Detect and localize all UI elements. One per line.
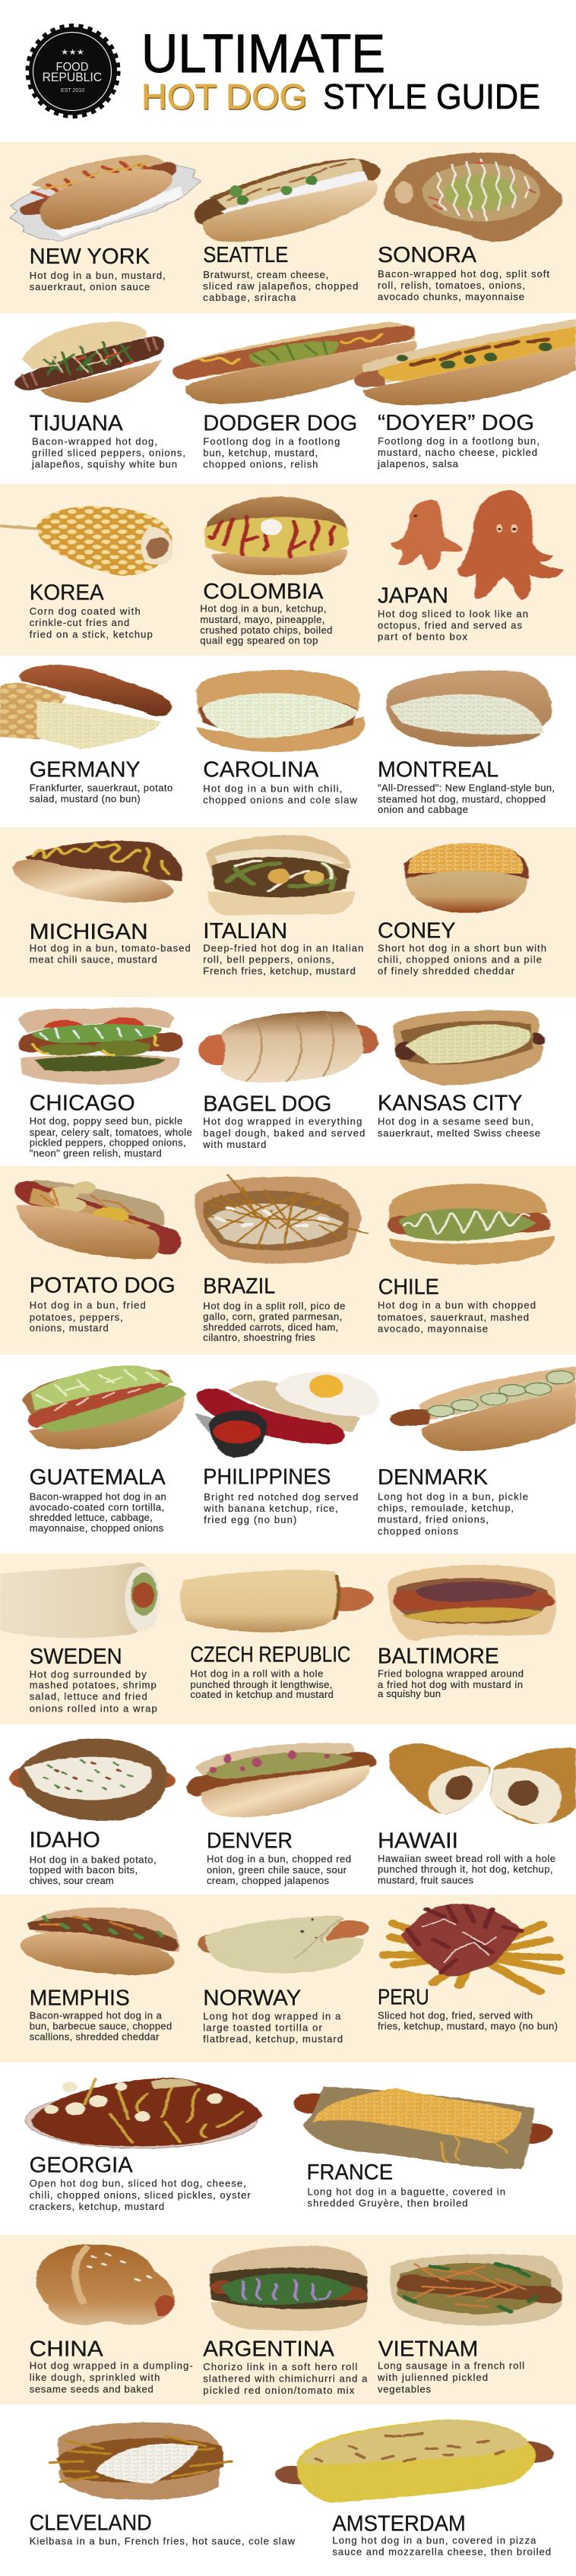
description: Guatemala: avocado-coated corn tortilla, bbox=[30, 1501, 164, 1512]
panel: Dodger Dog bbox=[172, 321, 417, 470]
title: New York: NEW YORK bbox=[30, 245, 150, 269]
description: Tijuana: jalapeños, squishy white bun bbox=[31, 459, 177, 470]
description: France: Long hot dog in a baguette, covered in bbox=[307, 2186, 505, 2197]
description: Argentina: pickled red onion/tomato mix bbox=[203, 2385, 355, 2396]
description: Seattle: Bratwurst, cream cheese, bbox=[203, 269, 328, 280]
panel: Argentina bbox=[203, 2246, 368, 2396]
panel: Colombia bbox=[200, 497, 349, 646]
illustration: Brazil hot dog bbox=[195, 1175, 367, 1263]
description: Baltimore: a squishy bun bbox=[378, 1688, 441, 1699]
description: Chile: tomatoes, sauerkraut, mashed bbox=[378, 1311, 529, 1323]
panel: Norway bbox=[198, 1916, 369, 2044]
heading: ultimate hot dog style guide: HOT DOG bbox=[141, 77, 307, 116]
title: Carolina: CAROLINA bbox=[203, 758, 319, 782]
illustration: Italian hot dog bbox=[206, 835, 354, 915]
band: row 5 bbox=[0, 827, 576, 997]
panel: Chicago bbox=[18, 1007, 192, 1159]
description: New York: Hot dog in a bun, mustard, bbox=[30, 270, 166, 281]
illustration: Philippines hot dog with egg bbox=[195, 1372, 379, 1457]
description: Norway: large toasted tortilla or bbox=[203, 2021, 323, 2033]
illustration: Doyer Dog bbox=[354, 319, 576, 405]
description: Denver: cream, chopped jalapenos bbox=[207, 1875, 330, 1886]
title: Georgia: GEORGIA bbox=[30, 2153, 133, 2177]
illustration: Germany sausage with sauerkraut bbox=[0, 665, 172, 750]
heading: ultimate hot dog style guide: ULTIMATE bbox=[141, 24, 385, 84]
description: Georgia bbox=[30, 2177, 251, 2212]
illustration: Baltimore hot dog bbox=[388, 1565, 556, 1641]
panel: Carolina bbox=[196, 670, 365, 806]
description: Georgia: chili, chopped onions, sliced pickles, oyster bbox=[30, 2189, 251, 2201]
description: Coney: of finely shredded cheddar bbox=[378, 966, 515, 977]
illustration: Bagel Dog bbox=[198, 1011, 378, 1083]
description: Czech Republic: Hot dog in a roll with a hole bbox=[190, 1667, 323, 1679]
illustration: Seattle hot dog bbox=[195, 158, 380, 242]
panel: Coney bbox=[378, 843, 546, 977]
description: Vietnam: with julienned pickled bbox=[377, 2372, 488, 2383]
description: Guatemala: shredded lettuce, cabbage, bbox=[30, 1512, 153, 1523]
description: Tijuana bbox=[31, 436, 185, 470]
description: France bbox=[307, 2186, 505, 2209]
title: Philippines: PHILIPPINES bbox=[203, 1465, 331, 1489]
description: Denmark: chips, remoulade, ketchup, bbox=[378, 1502, 514, 1513]
panel: Denmark bbox=[378, 1366, 576, 1537]
description: Doyer Dog: Footlong dog in a footlong bun, bbox=[378, 435, 540, 447]
description: Potato Dog bbox=[30, 1300, 146, 1334]
description: Michigan: Hot dog in a bun, tomato-based bbox=[30, 943, 191, 954]
description: Carolina: chopped onions and cole slaw bbox=[203, 795, 357, 806]
description: France: shredded Gruyère, then broiled bbox=[307, 2198, 468, 2209]
title: Cleveland: CLEVELAND bbox=[30, 2511, 152, 2536]
description: Norway bbox=[203, 2010, 343, 2044]
title: Kansas City: KANSAS CITY bbox=[378, 1092, 523, 1116]
description: Denmark bbox=[378, 1490, 528, 1537]
illustration: Coney hot dog bbox=[404, 843, 529, 913]
description: New York: sauerkraut, onion sauce bbox=[30, 281, 150, 292]
description: China: sesame seeds and baked bbox=[30, 2383, 153, 2394]
panel: Georgia bbox=[25, 2078, 263, 2212]
description: Sweden: onions rolled into a wrap bbox=[30, 1702, 157, 1714]
title: Tijuana: TIJUANA bbox=[30, 412, 123, 436]
description: Denmark: chopped onions bbox=[378, 1525, 459, 1537]
illustration: Guatemala hot dog bbox=[22, 1366, 185, 1449]
panel: Italian bbox=[203, 835, 363, 977]
description: Philippines bbox=[203, 1491, 358, 1525]
description: Coney: chili, chopped onions and a pile bbox=[378, 954, 542, 966]
panel: Baltimore bbox=[378, 1565, 556, 1699]
illustration: Denmark hot dog bbox=[390, 1366, 576, 1451]
title: Memphis: MEMPHIS bbox=[30, 1986, 130, 2010]
description: Chicago: "neon" green relish, mustard bbox=[30, 1148, 162, 1159]
illustration: Georgia open hot dog bbox=[25, 2078, 263, 2148]
illustration: Tijuana hot dog bbox=[14, 321, 164, 403]
panel: New York bbox=[11, 155, 201, 292]
description: China: like dough, sprinkled with bbox=[30, 2372, 160, 2383]
band: row 7 bbox=[0, 1166, 576, 1354]
description: Montreal: steamed hot dog, mustard, chopped bbox=[378, 794, 546, 805]
description: Denver: onion, green chile sauce, sour bbox=[207, 1864, 347, 1876]
illustration: Colombia hot dog bbox=[204, 497, 349, 575]
description: Hawaii: mustard, fruit sauces bbox=[378, 1874, 474, 1885]
description: Dodger Dog: chopped onions, relish bbox=[203, 459, 318, 470]
logo: Food Republic badge bbox=[28, 26, 118, 115]
description: Potato Dog: potatoes, peppers, bbox=[30, 1311, 123, 1323]
description: Brazil: shredded carrots, diced ham, bbox=[203, 1322, 338, 1333]
title: Michigan: MICHIGAN bbox=[30, 920, 148, 944]
illustration: Cleveland hot dog bbox=[49, 2423, 232, 2499]
description: Germany bbox=[30, 782, 172, 804]
description: Doyer Dog bbox=[377, 435, 540, 469]
panel: Denver bbox=[186, 1743, 377, 1886]
title: Peru: PERU bbox=[378, 1985, 429, 2009]
title: Denver: DENVER bbox=[207, 1829, 293, 1854]
title: Sweden: SWEDEN bbox=[30, 1645, 122, 1669]
title: China: CHINA bbox=[30, 2337, 103, 2362]
title: Dodger Dog: DODGER DOG bbox=[203, 412, 357, 436]
description: Memphis bbox=[30, 2009, 172, 2043]
description: Chile: Hot dog in a bun with chopped bbox=[378, 1300, 536, 1311]
illustration: Dodger Dog bbox=[172, 321, 417, 404]
description: Sonora bbox=[378, 268, 549, 302]
description: Bagel Dog: bagel dough, baked and served bbox=[203, 1127, 365, 1139]
logo: Food Republic badge: REPUBLIC bbox=[43, 70, 102, 84]
description: Dodger Dog: bun, ketchup, mustard, bbox=[203, 447, 318, 459]
description: Memphis: Bacon-wrapped hot dog in a bbox=[30, 2009, 162, 2021]
description: Brazil bbox=[203, 1300, 345, 1343]
description: Guatemala: mayonnaise, chopped onions bbox=[30, 1522, 164, 1534]
description: Cleveland: Kielbasa in a bun, French fries, hot sauce, cole slaw bbox=[30, 2535, 296, 2546]
band: row 11 bbox=[0, 1895, 576, 2062]
title: Denmark: DENMARK bbox=[378, 1465, 489, 1490]
illustration: Czech Republic hot dog bbox=[180, 1570, 374, 1633]
description: Memphis: scallions, shredded cheddar bbox=[30, 2031, 160, 2043]
description: Italian: French fries, ketchup, mustard bbox=[203, 966, 356, 977]
description: Guatemala bbox=[30, 1490, 166, 1534]
description: Kansas City: Hot dog in a sesame seed bun, bbox=[378, 1116, 533, 1127]
band: row 1 bbox=[0, 142, 576, 313]
description: Colombia: quail egg speared on top bbox=[200, 635, 318, 646]
description: Idaho bbox=[30, 1854, 157, 1886]
description: Korea: crinkle-cut fries and bbox=[30, 617, 129, 628]
panel: Seattle bbox=[195, 158, 380, 303]
description: Hawaii bbox=[378, 1853, 555, 1885]
description: Japan: part of bento box bbox=[378, 631, 468, 643]
description: Philippines: fried egg (no bun) bbox=[204, 1514, 296, 1525]
description: Argentina bbox=[203, 2361, 368, 2396]
panel: Cleveland bbox=[30, 2423, 296, 2546]
description: Argentina: Chorizo link in a soft hero roll bbox=[203, 2361, 357, 2372]
panel: Philippines bbox=[195, 1372, 379, 1525]
band: row 3 bbox=[0, 484, 576, 656]
description: Chicago: spear, celery salt, tomatoes, whole bbox=[30, 1127, 192, 1138]
description: Michigan: meat chili sauce, mustard bbox=[30, 954, 157, 966]
description: Baltimore: a fried hot dog with mustard in bbox=[378, 1679, 523, 1690]
panel: Brazil bbox=[195, 1175, 367, 1343]
description: Korea bbox=[30, 605, 153, 640]
title: Sonora: SONORA bbox=[378, 243, 477, 267]
description: Dodger Dog: Footlong dog in a footlong bbox=[203, 436, 340, 447]
description: Colombia: Hot dog in a bun, ketchup, bbox=[200, 603, 326, 615]
panel: Michigan bbox=[13, 841, 191, 966]
illustration: Vietnam hot dog bbox=[390, 2254, 562, 2326]
title: Guatemala: GUATEMALA bbox=[30, 1465, 166, 1490]
description: Japan: octopus, fried and served as bbox=[378, 620, 523, 631]
illustration: Japan octopus hot dogs bbox=[391, 490, 564, 600]
title: Bagel Dog: BAGEL DOG bbox=[203, 1092, 331, 1117]
title: Brazil: BRAZIL bbox=[203, 1274, 275, 1298]
panel: Doyer Dog bbox=[354, 319, 576, 469]
description: Amsterdam: Long hot dog in a bun, covered in pizza bbox=[332, 2534, 536, 2546]
panel: Montreal bbox=[378, 670, 555, 815]
title: Norway: NORWAY bbox=[203, 1986, 301, 2010]
title: Hawaii: HAWAII bbox=[378, 1828, 458, 1853]
description: Sweden: Hot dog surrounded by bbox=[30, 1668, 147, 1680]
description: Peru: fries, ketchup, mustard, mayo (no bun) bbox=[378, 2021, 558, 2032]
description: Sonora: avocado chunks, mayonnaise bbox=[378, 291, 524, 302]
illustration: Chicago hot dog bbox=[18, 1007, 183, 1085]
logo: Food Republic badge: EST 2010 bbox=[61, 88, 84, 93]
description: Bagel Dog: Hot dog wrapped in everything bbox=[203, 1116, 362, 1127]
title: Czech Republic: CZECH REPUBLIC bbox=[190, 1642, 350, 1667]
description: Memphis: bun, barbecue sauce, chopped bbox=[30, 2021, 172, 2032]
description: Philippines: with banana ketchup, rice, bbox=[203, 1503, 338, 1514]
title: Idaho: IDAHO bbox=[30, 1828, 100, 1853]
description: Seattle: cabbage, sriracha bbox=[203, 292, 296, 303]
illustration: Carolina hot dog bbox=[196, 670, 365, 752]
description: Czech Republic: coated in ketchup and mustard bbox=[190, 1689, 334, 1700]
description: Coney bbox=[378, 943, 546, 977]
description: Sonora: Bacon-wrapped hot dog, split soft bbox=[378, 268, 549, 280]
description: Denmark: mustard, fried onions, bbox=[378, 1513, 489, 1525]
illustration: Sweden wrap bbox=[0, 1563, 160, 1638]
description: Michigan bbox=[30, 943, 191, 966]
illustration: China dumpling hot dog bbox=[36, 2245, 175, 2325]
description: Seattle: sliced raw jalapeños, chopped bbox=[203, 280, 358, 292]
description: Chicago: pickled peppers, chopped onions, bbox=[30, 1137, 186, 1149]
title: Chile: CHILE bbox=[378, 1275, 439, 1299]
title: Seattle: SEATTLE bbox=[203, 243, 288, 267]
panel: Sweden bbox=[0, 1563, 160, 1714]
title: France: FRANCE bbox=[307, 2160, 393, 2185]
description: Guatemala: Bacon-wrapped hot dog in an bbox=[30, 1490, 166, 1502]
description: Montreal bbox=[378, 782, 555, 815]
description: Tijuana: Bacon-wrapped hot dog, bbox=[32, 436, 157, 447]
panel: Sonora bbox=[378, 153, 562, 302]
description: Hawaii: Hawaiian sweet bread roll with a hole bbox=[378, 1853, 555, 1864]
title: Doyer Dog: “DOYER” DOG bbox=[378, 411, 534, 435]
title: Potato Dog: POTATO DOG bbox=[30, 1274, 176, 1298]
description: Doyer Dog: jalapenos, salsa bbox=[377, 458, 459, 469]
illustration: Argentina hot dog bbox=[210, 2246, 367, 2331]
title: Italian: ITALIAN bbox=[203, 919, 287, 943]
illustration: Idaho baked potato hot dog bbox=[9, 1738, 176, 1821]
description: Italian: roll, bell peppers, onions, bbox=[203, 954, 334, 966]
description: Colombia: crushed potato chips, boiled bbox=[200, 624, 332, 636]
logo: Food Republic badge: ★★★ bbox=[61, 48, 84, 57]
panel: Bagel Dog bbox=[198, 1011, 378, 1150]
description: Argentina: slathered with chimichurri and a bbox=[203, 2373, 368, 2385]
illustration: Peru fries with sliced hot dog bbox=[384, 1904, 560, 1992]
description: Idaho: chives, sour cream bbox=[30, 1875, 114, 1886]
description: Idaho: Hot dog in a baked potato, bbox=[30, 1854, 157, 1865]
description: Japan: Hot dog sliced to look like an bbox=[378, 608, 528, 620]
description: Dodger Dog bbox=[203, 436, 340, 470]
panel: China bbox=[30, 2245, 193, 2394]
description: Georgia: crackers, ketchup, mustard bbox=[30, 2201, 164, 2212]
description: Carolina: Hot dog in a bun with chili, bbox=[203, 782, 342, 794]
panel: Idaho bbox=[9, 1738, 176, 1886]
illustration: Chile hot dog bbox=[388, 1184, 555, 1265]
panel: Czech Republic bbox=[180, 1570, 374, 1700]
panel: Peru bbox=[378, 1904, 560, 2032]
description: Korea: Corn dog coated with bbox=[30, 605, 141, 617]
description: Montreal: "All-Dressed": New England-style bun, bbox=[378, 782, 555, 794]
title: Japan: JAPAN bbox=[378, 583, 448, 608]
description: Coney: Short hot dog in a short bun with bbox=[378, 943, 546, 954]
band: row 13 bbox=[0, 2235, 576, 2404]
description: Doyer Dog: mustard, nacho cheese, pickled bbox=[378, 447, 537, 458]
description: Philippines: Bright red notched dog served bbox=[204, 1491, 358, 1503]
description: Montreal: onion and cabbage bbox=[378, 804, 468, 815]
title: Baltimore: BALTIMORE bbox=[378, 1644, 498, 1668]
illustration: Korea corn dog bbox=[0, 506, 173, 576]
heading: ultimate hot dog style guide: STYLE GUIDE bbox=[323, 77, 540, 116]
description: Kansas City: sauerkraut, melted Swiss cheese bbox=[378, 1127, 540, 1139]
description: Denver: Hot dog in a bun, chopped red bbox=[207, 1854, 351, 1865]
description: Bagel Dog bbox=[202, 1116, 365, 1150]
description: Amsterdam: sauce and mozzarella cheese, then broiled bbox=[332, 2546, 551, 2557]
panel: France bbox=[294, 2087, 553, 2209]
logo: Food Republic badge: FOOD bbox=[56, 61, 88, 74]
panel: Guatemala bbox=[22, 1366, 185, 1534]
illustration: Sonora hot dog bbox=[384, 153, 562, 242]
panel: Germany bbox=[0, 665, 172, 804]
description: Hawaii: punched through it, hot dog, ketchup, bbox=[378, 1863, 553, 1875]
illustration: France baguette hot dog bbox=[294, 2087, 553, 2169]
description: Germany: Frankfurter, sauerkraut, potato bbox=[30, 782, 172, 794]
panel: Potato Dog bbox=[14, 1180, 181, 1334]
description: New York bbox=[30, 270, 166, 292]
description: Baltimore: Fried bologna wrapped around bbox=[378, 1667, 524, 1679]
title: Amsterdam: AMSTERDAM bbox=[332, 2512, 466, 2536]
title: Montreal: MONTREAL bbox=[378, 758, 498, 782]
description: Sweden: mashed potatoes, shrimp bbox=[30, 1679, 157, 1691]
description: Colombia bbox=[200, 603, 332, 646]
description: Vietnam: vegetables bbox=[378, 2383, 432, 2394]
description: Potato Dog: Hot dog in a bun, fried bbox=[30, 1300, 146, 1311]
title: Korea: KOREA bbox=[30, 580, 104, 605]
panel: Amsterdam bbox=[276, 2420, 554, 2557]
description: Korea: fried on a stick, ketchup bbox=[30, 628, 153, 640]
description: Potato Dog: onions, mustard bbox=[30, 1323, 109, 1334]
title: Vietnam: VIETNAM bbox=[378, 2337, 478, 2362]
description: Chile bbox=[378, 1300, 536, 1334]
description: Idaho: topped with bacon bits, bbox=[30, 1864, 138, 1876]
panel: Japan bbox=[378, 490, 564, 643]
illustration: Montreal hot dog bbox=[386, 670, 552, 747]
illustration: Potato Dog bbox=[14, 1180, 181, 1259]
description: Norway: Long hot dog wrapped in a bbox=[203, 2010, 341, 2021]
description: Vietnam: Long sausage in a french roll bbox=[378, 2359, 524, 2371]
description: Germany: salad, mustard (no bun) bbox=[30, 793, 141, 804]
title: Chicago: CHICAGO bbox=[30, 1092, 135, 1116]
description: Colombia: mustard, mayo, pineapple, bbox=[200, 614, 324, 625]
description: Denmark: Long hot dog in a bun, pickle bbox=[378, 1490, 528, 1502]
panel: Hawaii bbox=[378, 1743, 576, 1885]
panel: Kansas City bbox=[378, 1010, 546, 1139]
band: row 9 bbox=[0, 1554, 576, 1724]
description: Czech Republic: punched through it lengthwise, bbox=[190, 1679, 332, 1690]
description: Chile: avocado, mayonnaise bbox=[378, 1323, 488, 1334]
description: Carolina bbox=[203, 782, 357, 806]
description: Brazil: Hot dog in a split roll, pico de bbox=[203, 1300, 345, 1311]
illustration: Michigan hot dog bbox=[13, 841, 182, 902]
description: Sweden bbox=[30, 1668, 157, 1714]
panel: Chile bbox=[378, 1184, 555, 1334]
heading: ultimate hot dog style guide bbox=[141, 24, 540, 116]
description: Norway: flatbread, ketchup, mustard bbox=[203, 2033, 343, 2044]
description: Sweden: salad, lettuce and fried bbox=[30, 1690, 147, 1702]
description: Chicago bbox=[30, 1115, 192, 1159]
description: Baltimore bbox=[378, 1667, 524, 1699]
illustration: Memphis hot dog bbox=[21, 1908, 179, 1975]
illustration: Amsterdam hot dog bbox=[276, 2420, 554, 2503]
description: Tijuana: grilled sliced peppers, onions, bbox=[32, 447, 185, 459]
description: Brazil: gallo, corn, grated parmesan, bbox=[203, 1310, 342, 1322]
description: Bagel Dog: with mustard bbox=[202, 1139, 266, 1150]
description: China bbox=[30, 2359, 193, 2394]
description: Czech Republic bbox=[190, 1667, 334, 1700]
panel: Korea bbox=[0, 506, 173, 640]
title: Colombia: COLOMBIA bbox=[203, 580, 324, 604]
description: Sonora: roll, relish, tomatoes, onions, bbox=[378, 280, 525, 291]
illustration: Hawaii bread roll hot dog bbox=[389, 1743, 576, 1825]
title: Argentina: ARGENTINA bbox=[203, 2337, 334, 2362]
description: China: Hot dog wrapped in a dumpling- bbox=[30, 2359, 193, 2371]
description: Peru bbox=[378, 2010, 558, 2032]
description: Italian: Deep-fried hot dog in an Italian bbox=[203, 943, 363, 954]
panel: Tijuana bbox=[14, 321, 185, 470]
illustration: New York hot dog bbox=[11, 155, 201, 241]
description: Amsterdam bbox=[332, 2534, 551, 2557]
description: Denver bbox=[207, 1854, 351, 1886]
title: Coney: CONEY bbox=[378, 918, 456, 943]
description: Georgia: Open hot dog bun, sliced hot dog, cheese, bbox=[30, 2177, 246, 2189]
illustration: Kansas City hot dog bbox=[393, 1010, 546, 1085]
description: Vietnam bbox=[377, 2359, 524, 2394]
description: Kansas City bbox=[378, 1116, 540, 1139]
description: Seattle bbox=[203, 269, 358, 303]
title: Germany: GERMANY bbox=[30, 758, 141, 782]
illustration: Norway tortilla hot dog bbox=[198, 1916, 369, 1973]
panel: Memphis bbox=[21, 1908, 179, 2043]
description: Chicago: Hot dog, poppy seed bun, pickle bbox=[30, 1115, 182, 1127]
panel: Vietnam bbox=[377, 2254, 562, 2394]
description: Italian bbox=[203, 943, 363, 977]
illustration: Denver hot dog bbox=[186, 1743, 377, 1817]
description: Japan bbox=[378, 608, 528, 643]
description: Peru: Sliced hot dog, fried, served with bbox=[378, 2010, 533, 2021]
description: Brazil: cilantro, shoestring fries bbox=[203, 1332, 315, 1343]
